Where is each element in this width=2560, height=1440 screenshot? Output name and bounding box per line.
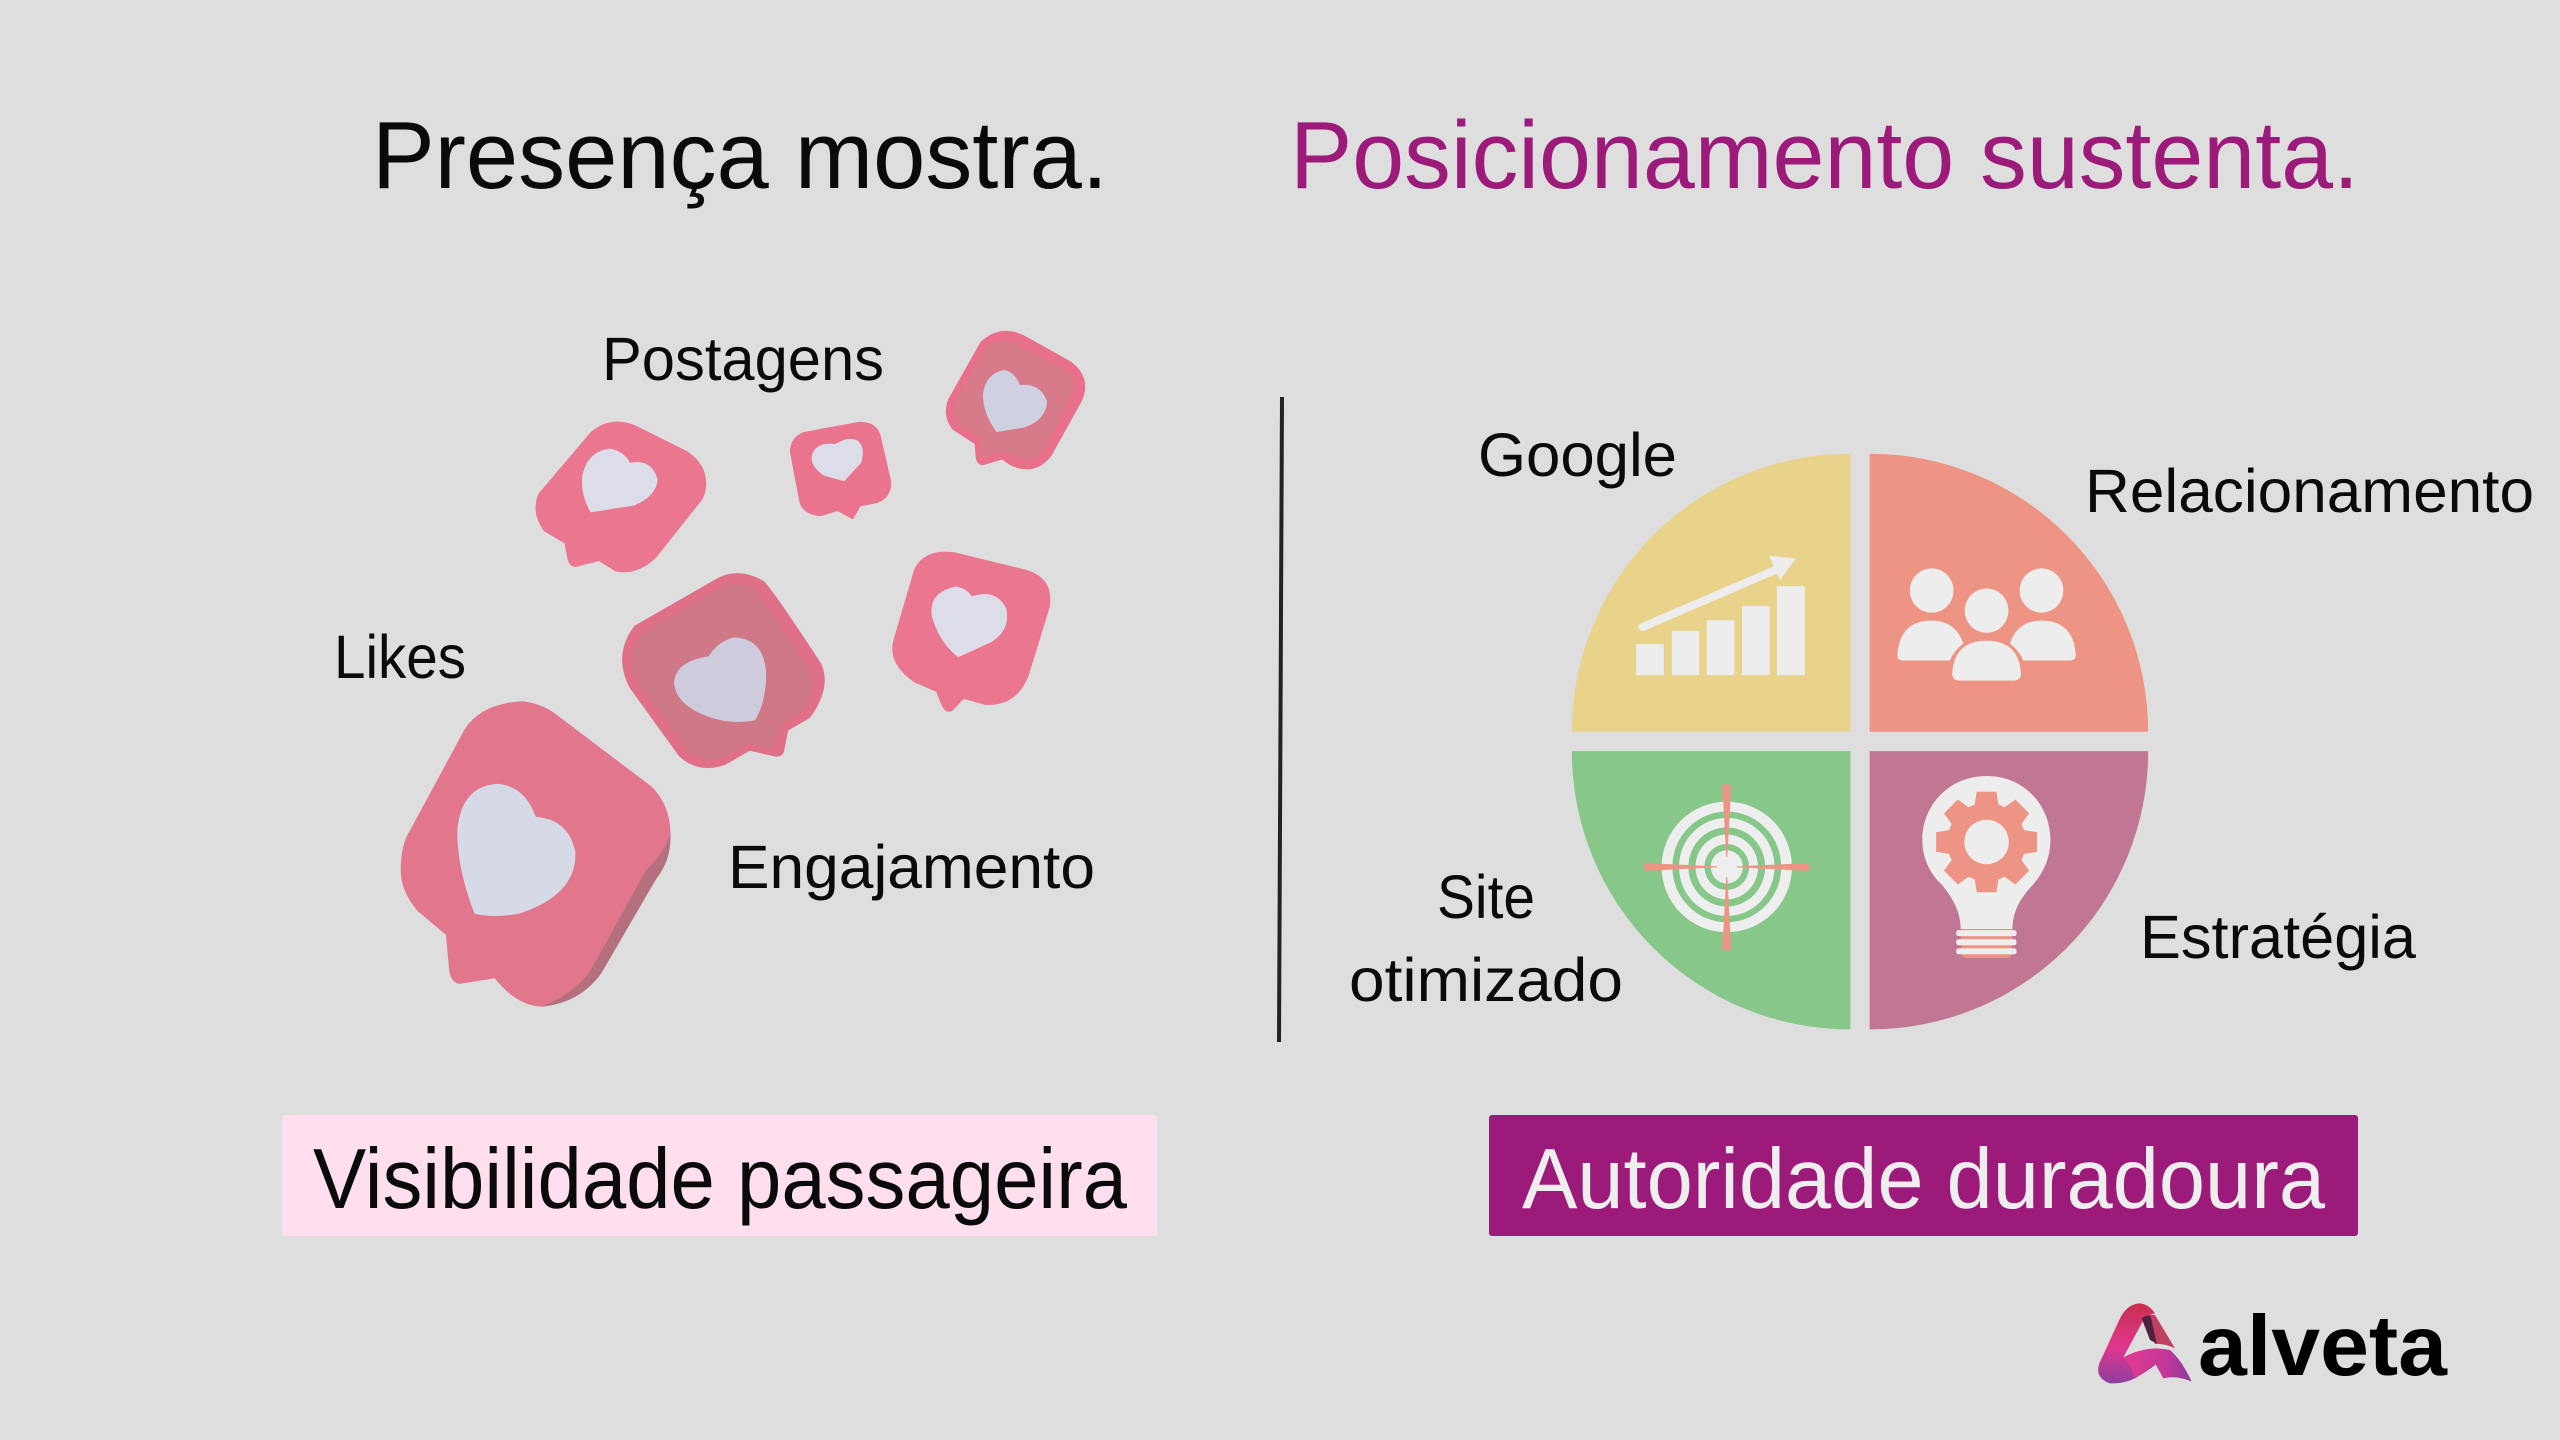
label: Estratégia: Estratégia bbox=[2140, 903, 2416, 971]
icon: middle like bubble bbox=[622, 573, 825, 768]
label: Engajamento: Engajamento bbox=[728, 833, 1095, 901]
label: Site otimizado: Site bbox=[1437, 863, 1535, 931]
title: positioning: Posicionamento sustenta. bbox=[1290, 102, 2359, 209]
icon: people bbox=[1897, 568, 2076, 681]
icon: target bbox=[1645, 785, 1809, 950]
label: Postagens: Postagens bbox=[602, 325, 884, 393]
icon: large like bubble bbox=[401, 701, 671, 1007]
callout: Autoridade duradoura: Autoridade duradoura bbox=[1522, 1132, 2326, 1227]
wordmark: alveta bbox=[2198, 1299, 2448, 1394]
quadrant: Relacionamento bbox=[1870, 454, 2148, 732]
logo: alveta bbox=[2098, 1299, 2448, 1394]
callout: Visibilidade passageira: Visibilidade passageira bbox=[313, 1132, 1128, 1227]
quadrant: Google bbox=[1572, 454, 1850, 732]
icon: small like bubble bbox=[790, 422, 891, 519]
label: Site otimizado bbox=[1349, 863, 1623, 1014]
quadrant: Estratégia bbox=[1870, 751, 2148, 1029]
icon: logo mark bbox=[2098, 1303, 2192, 1383]
label: Site otimizado: otimizado bbox=[1349, 946, 1623, 1014]
icon: light bulb with gear bbox=[1922, 776, 2050, 958]
chart: four quadrant pie bbox=[1572, 454, 2148, 1029]
divider: vertical line bbox=[1279, 397, 1282, 1042]
icon: growth chart bbox=[1636, 556, 1805, 675]
label: Relacionamento: Relacionamento bbox=[2085, 457, 2534, 525]
icon: top right like bubble bbox=[946, 331, 1085, 469]
title: presence: Presença mostra. bbox=[372, 102, 1108, 209]
label: Google: Google bbox=[1478, 421, 1677, 489]
quadrant: Site otimizado bbox=[1572, 751, 1850, 1029]
panel: like bubbles bbox=[401, 331, 1085, 1007]
label: Likes: Likes bbox=[334, 623, 466, 691]
icon: right like bubble bbox=[892, 552, 1050, 712]
icon: top left like bubble bbox=[536, 422, 706, 572]
